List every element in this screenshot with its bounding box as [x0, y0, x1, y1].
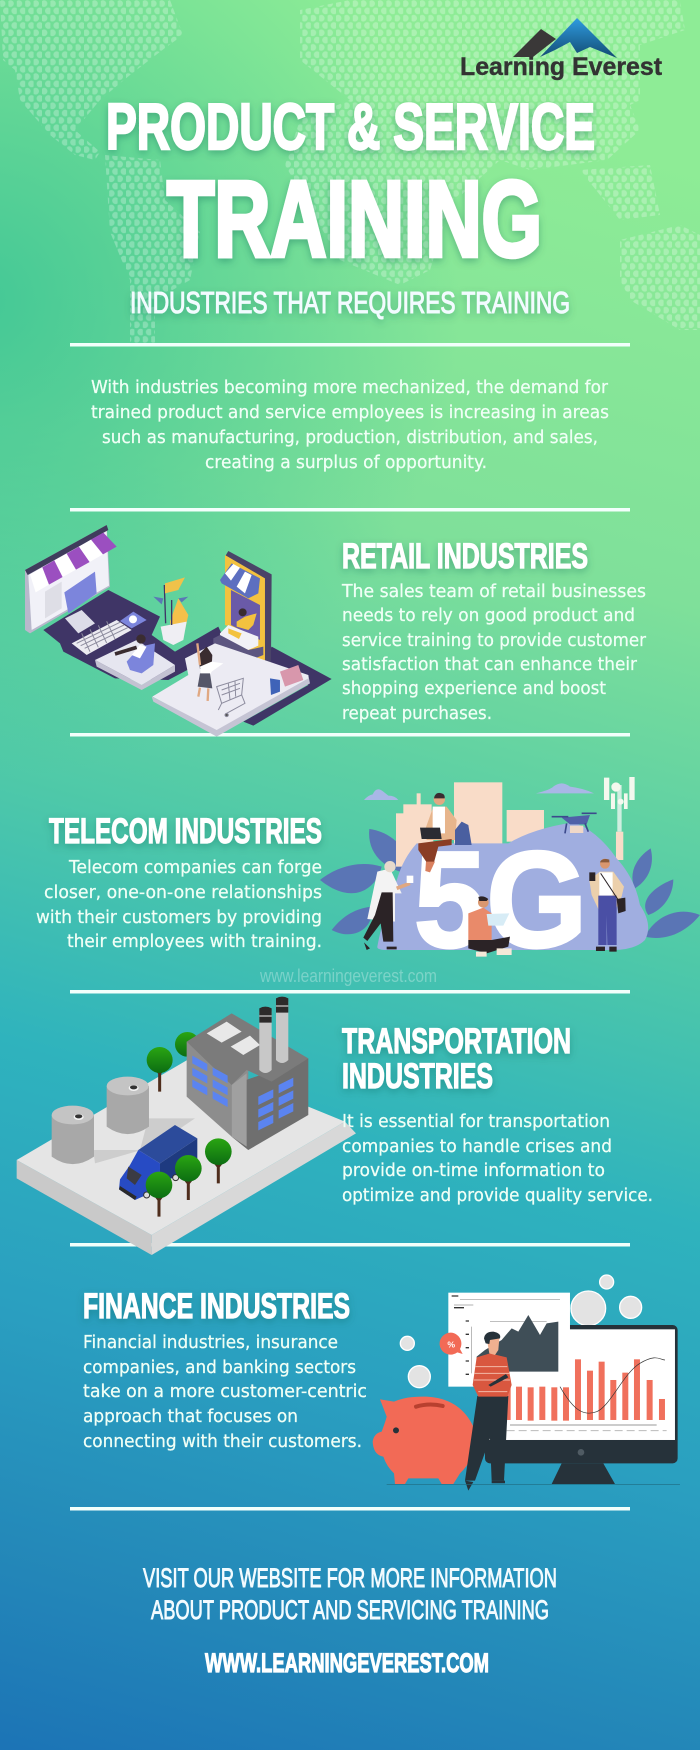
keyboard: [72, 620, 132, 655]
transportation text block: provide on-time information to: [342, 1161, 605, 1181]
windows: [192, 1056, 293, 1130]
watermark: www.learningeverest.com: [259, 966, 437, 986]
title: [106, 90, 595, 279]
retail text block: satisfaction that can enhance their: [342, 655, 638, 675]
finance text block: [83, 1333, 367, 1452]
transportation text block: companies to handle crises and: [342, 1137, 612, 1157]
retail text block: needs to rely on good product and: [342, 606, 635, 626]
intro text block: [91, 378, 609, 473]
tree: [147, 1047, 173, 1092]
right platform: [152, 643, 310, 737]
retail text block: [341, 582, 647, 724]
heading: retail: RETAIL INDUSTRIES: [342, 537, 588, 576]
truck: [119, 1125, 197, 1200]
intro text block: creating a surplus of opportunity.: [205, 453, 487, 473]
man with messenger bag: [589, 859, 626, 952]
woman with phone: [363, 861, 413, 950]
panel: 5G illustration: [320, 777, 700, 976]
retail text block: service training to provide customer: [342, 631, 647, 651]
percent bubble: [440, 1333, 463, 1355]
divider lines: [70, 343, 630, 1510]
intro text block: such as manufacturing, production, distribution, and sales,: [102, 428, 598, 448]
finance text block: connecting with their customers.: [83, 1432, 362, 1452]
storage tank: [52, 1106, 94, 1164]
finance text block: Financial industries, insurance: [83, 1333, 338, 1353]
panel: finance illustration: [373, 1275, 680, 1491]
title: TRAINING: [167, 158, 542, 279]
telecom text block: closer, one-on-one relationships: [44, 883, 322, 903]
chimneys: [259, 997, 288, 1073]
percent bubble: %: [447, 1339, 455, 1349]
leaves: [320, 829, 700, 938]
logo: Learning Everest: Learning Everest: [460, 53, 663, 81]
antenna tower: [604, 777, 635, 860]
icon: mountain: [513, 18, 617, 58]
plant pot: [153, 577, 188, 645]
telecom text block: Telecom companies can forge: [68, 858, 322, 878]
storage tank: [107, 1077, 149, 1134]
retail text block: repeat purchases.: [342, 704, 492, 724]
retail text block: The sales team of retail businesses: [341, 582, 646, 602]
intro text block: With industries becoming more mechanized, the demand for: [91, 378, 609, 398]
transportation text block: It is essential for transportation: [342, 1112, 610, 1132]
logo: Learning Everest: [460, 18, 663, 81]
finance text block: companies, and banking sectors: [83, 1358, 356, 1378]
transportation text block: optimize and provide quality service.: [342, 1186, 653, 1206]
man with tablet: [465, 1332, 512, 1491]
phone storefront: [213, 551, 272, 672]
seated man with tablet: [468, 896, 512, 957]
platform: [17, 1058, 356, 1255]
5G lettering: 5G: [414, 823, 587, 976]
heading: transportation: [342, 1022, 571, 1096]
call to action text: [143, 1563, 557, 1625]
telecom text block: [36, 858, 322, 952]
intro text block: trained product and service employees is increasing in areas: [91, 403, 609, 423]
dotted world map: [0, 0, 700, 345]
bar chart: [505, 1359, 665, 1421]
left platform: [95, 634, 175, 690]
finance text block: approach that focuses on: [83, 1407, 298, 1427]
city buildings: [396, 782, 544, 867]
shopping cart: [217, 678, 245, 717]
person with laptop: [418, 793, 472, 872]
heading: transportation: INDUSTRIES: [342, 1057, 493, 1096]
coins: [400, 1275, 642, 1388]
trees: [146, 1138, 232, 1217]
finance text block: take on a more customer-centric: [83, 1382, 367, 1402]
cloud blob: [377, 822, 648, 950]
transportation text block: [342, 1112, 653, 1206]
panel: retail illustration: [25, 525, 332, 737]
panel: factory illustration: [17, 997, 356, 1255]
monitor: [485, 1325, 678, 1484]
report sheet: [448, 1293, 570, 1387]
retail text block: shopping experience and boost: [342, 679, 606, 699]
telecom text block: with their customers by providing: [36, 908, 322, 928]
clouds: [364, 783, 594, 800]
telecom text block: their employees with training.: [67, 932, 322, 952]
shopper: [197, 643, 223, 701]
heading: transportation: TRANSPORTATION: [342, 1022, 571, 1061]
factory building: [187, 997, 308, 1150]
heading: telecom: TELECOM INDUSTRIES: [49, 812, 322, 851]
heading: finance: FINANCE INDUSTRIES: [83, 1287, 350, 1326]
drone: [552, 813, 597, 833]
piggy bank: [373, 1397, 474, 1484]
website url: WWW.LEARNINGEVEREST.COM: [205, 1648, 489, 1678]
